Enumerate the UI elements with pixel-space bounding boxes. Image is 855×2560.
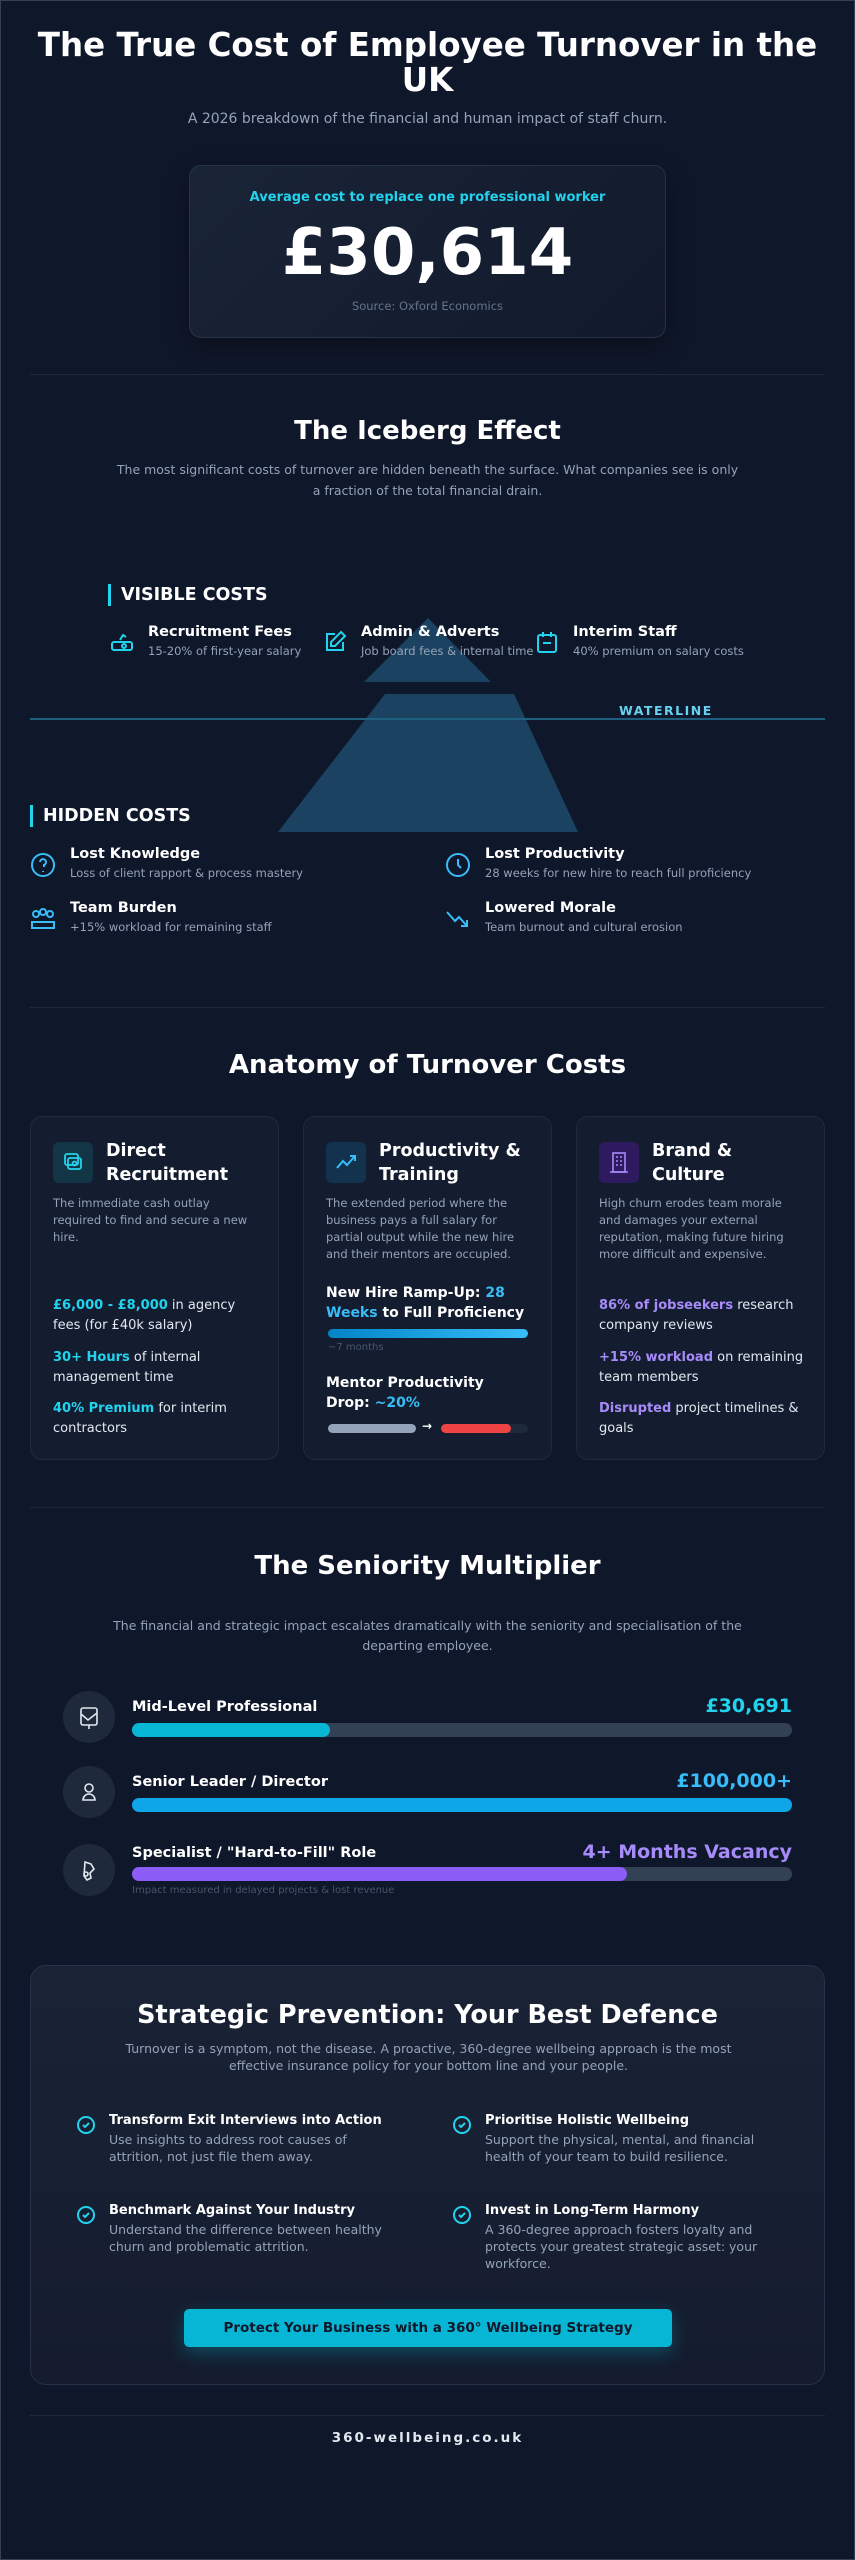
icon: question [31,853,55,877]
prevention description: Turnover is a symptom, not the disease. A proactive, 360-degree wellbeing approach is the most effective insurance policy for your bottom line and your people. [126,2041,732,2073]
visible item: admin: Admin & Adverts [361,624,499,640]
item: benchmark: Benchmark Against Your Industry [109,2203,355,2218]
iceberg description: The most significant costs of turnover are hidden beneath the surface. What companies see is only a fraction of the total financial drain. [117,462,738,498]
visible item: recruitment fees: 15-20% of first-year salary [148,644,301,658]
item: long-term harmony: Invest in Long-Term Harmony [485,2203,699,2218]
hidden item: lowered morale: Lowered Morale [485,900,616,916]
item: exit interviews: Transform Exit Interviews into Action [109,2113,382,2128]
icon: pen [326,630,346,651]
row: mid-level: £30,691 [705,1695,792,1717]
card: brand & culture: +15% workload on remaining team members [599,1350,803,1385]
card title: Training [379,1165,459,1185]
footer: 360-wellbeing.co.uk [332,2430,523,2446]
mentor stat: Mentor Productivity Drop: ~20% [326,1375,484,1411]
ramp-up bar [328,1329,528,1338]
waterline [30,718,825,720]
visible item: recruitment fees: Recruitment Fees [148,624,292,640]
icon: clock [446,853,470,877]
hidden item: team burden: Team Burden [70,900,177,916]
visible item: recruitment fees [111,624,301,658]
icon: calendar [537,632,557,653]
iceberg graphic [278,618,578,832]
card: direct recruitment: 30+ Hours of internal management time [53,1350,200,1385]
hidden item: team burden: +15% workload for remaining staff [70,920,272,934]
hero stat card [189,165,666,338]
item: long-term harmony: A 360-degree approach fosters loyalty and protects your greatest strategic asset: your workforce. [485,2222,757,2271]
card: productivity: ~7 months [328,1342,384,1353]
item: holistic wellbeing: Support the physical, mental, and financial health of your team to build resilience. [485,2132,754,2164]
icon: team [31,908,55,929]
icon: trend up [326,1142,366,1183]
hidden item: lost productivity [446,846,751,880]
mentor bars: → [422,1419,432,1433]
item: long-term harmony [453,2203,758,2271]
row: specialist: 4+ Months Vacancy [582,1841,792,1863]
hidden item: lost knowledge: Lost Knowledge [70,846,200,862]
hidden item: lost productivity: Lost Productivity [485,846,625,862]
hidden item: lost knowledge [31,846,303,880]
card: direct recruitment [30,1116,279,1460]
card title [106,1141,228,1185]
row: mid-level: Mid-Level Professional [132,1699,317,1715]
hidden costs heading: HIDDEN COSTS [43,806,191,826]
seniority heading: The Seniority Multiplier [254,1551,601,1581]
card: direct recruitment: 40% Premium for interim contractors [53,1401,227,1436]
stats: £6,000 - £8,000 in agency fees (for £40k salary) [53,1298,235,1333]
card: brand & culture: Disrupted project timelines & goals [599,1401,799,1436]
row: senior leader: £100,000+ [676,1770,792,1792]
ramp-up stat: New Hire Ramp-Up: 28 Weeks to Full Proficiency [326,1285,524,1321]
row: mid-level [63,1691,792,1743]
hidden item: lowered morale: Team burnout and cultural erosion [485,920,683,934]
source: Source: Oxford Economics [352,299,503,313]
hidden item: lost productivity: 28 weeks for new hire to reach full proficiency [485,866,751,880]
iceberg heading: The Iceberg Effect [294,416,561,446]
card title: Direct [106,1141,166,1161]
visible costs heading: VISIBLE COSTS [121,585,268,605]
card: brand & culture [576,1116,825,1460]
stat number: £30,614 [282,216,573,290]
CTA button [184,2309,672,2347]
title [38,26,817,99]
panel: strategic prevention [30,1965,825,2385]
card title [379,1141,521,1185]
card description: High churn erodes team morale and damages your external reputation, making future hiring more difficult and expensive. [599,1196,784,1261]
icon: check [77,2116,95,2134]
card title [652,1141,732,1185]
visible item: interim: 40% premium on salary costs [573,644,744,658]
visible item: interim: Interim Staff [573,624,677,640]
waterline label: WATERLINE [619,703,713,718]
hidden item: lowered morale [446,900,683,934]
card description: The immediate cash outlay required to find and secure a new hire. [53,1196,247,1244]
card: productivity [303,1116,552,1460]
visible item: admin [326,624,533,658]
stats: 86% of jobseekers research company reviews [599,1298,793,1333]
visible item: admin: Job board fees & internal time [361,644,533,658]
item: benchmark: Understand the difference between healthy churn and problematic attrition. [109,2222,382,2254]
hidden item: team burden [31,900,272,934]
card title: Culture [652,1165,725,1185]
card title: Recruitment [106,1165,228,1185]
icon: money hand [111,634,133,651]
item: benchmark [77,2203,382,2254]
row: senior leader: Senior Leader / Director [132,1774,328,1790]
row: specialist: Impact measured in delayed projects & lost revenue [132,1885,394,1896]
subtitle: A 2026 breakdown of the financial and human impact of staff churn. [188,111,667,127]
icon: check [453,2116,471,2134]
row: senior leader [63,1766,792,1818]
card description: The extended period where the business pays a full salary for partial output while the new hire and their mentors are occupied. [326,1196,514,1261]
icon: check [77,2206,95,2224]
item: exit interviews: Use insights to address root causes of attrition, not just file them away. [109,2132,347,2164]
row: specialist: Specialist / "Hard-to-Fill" Role [132,1845,376,1861]
anatomy heading: Anatomy of Turnover Costs [229,1050,626,1080]
icon: person [63,1766,115,1818]
icon: briefcase [63,1691,115,1743]
icon: trend down [446,911,468,927]
icon: check [453,2206,471,2224]
icon: cash [53,1142,93,1183]
title: The True Cost of Employee Turnover in the [38,26,817,64]
icon: puzzle [63,1844,115,1896]
prevention heading: Strategic Prevention: Your Best Defence [137,2000,718,2030]
title: UK [402,61,453,99]
card title: Productivity & [379,1141,521,1161]
item: exit interviews [77,2113,382,2164]
card title: Brand & [652,1141,732,1161]
row: specialist [63,1841,792,1896]
icon: building [599,1142,639,1183]
CTA button: Protect Your Business with a 360° Wellbeing Strategy [223,2320,633,2336]
hidden item: lost knowledge: Loss of client rapport & process mastery [70,866,303,880]
item: holistic wellbeing [453,2113,754,2164]
stat label: Average cost to replace one professional worker [250,190,605,205]
visible item: interim [537,624,744,658]
seniority description: The financial and strategic impact escalates dramatically with the seniority and specialisation of the departing employee. [113,1618,742,1653]
item: holistic wellbeing: Prioritise Holistic Wellbeing [485,2113,689,2128]
mentor bars [328,1419,528,1433]
